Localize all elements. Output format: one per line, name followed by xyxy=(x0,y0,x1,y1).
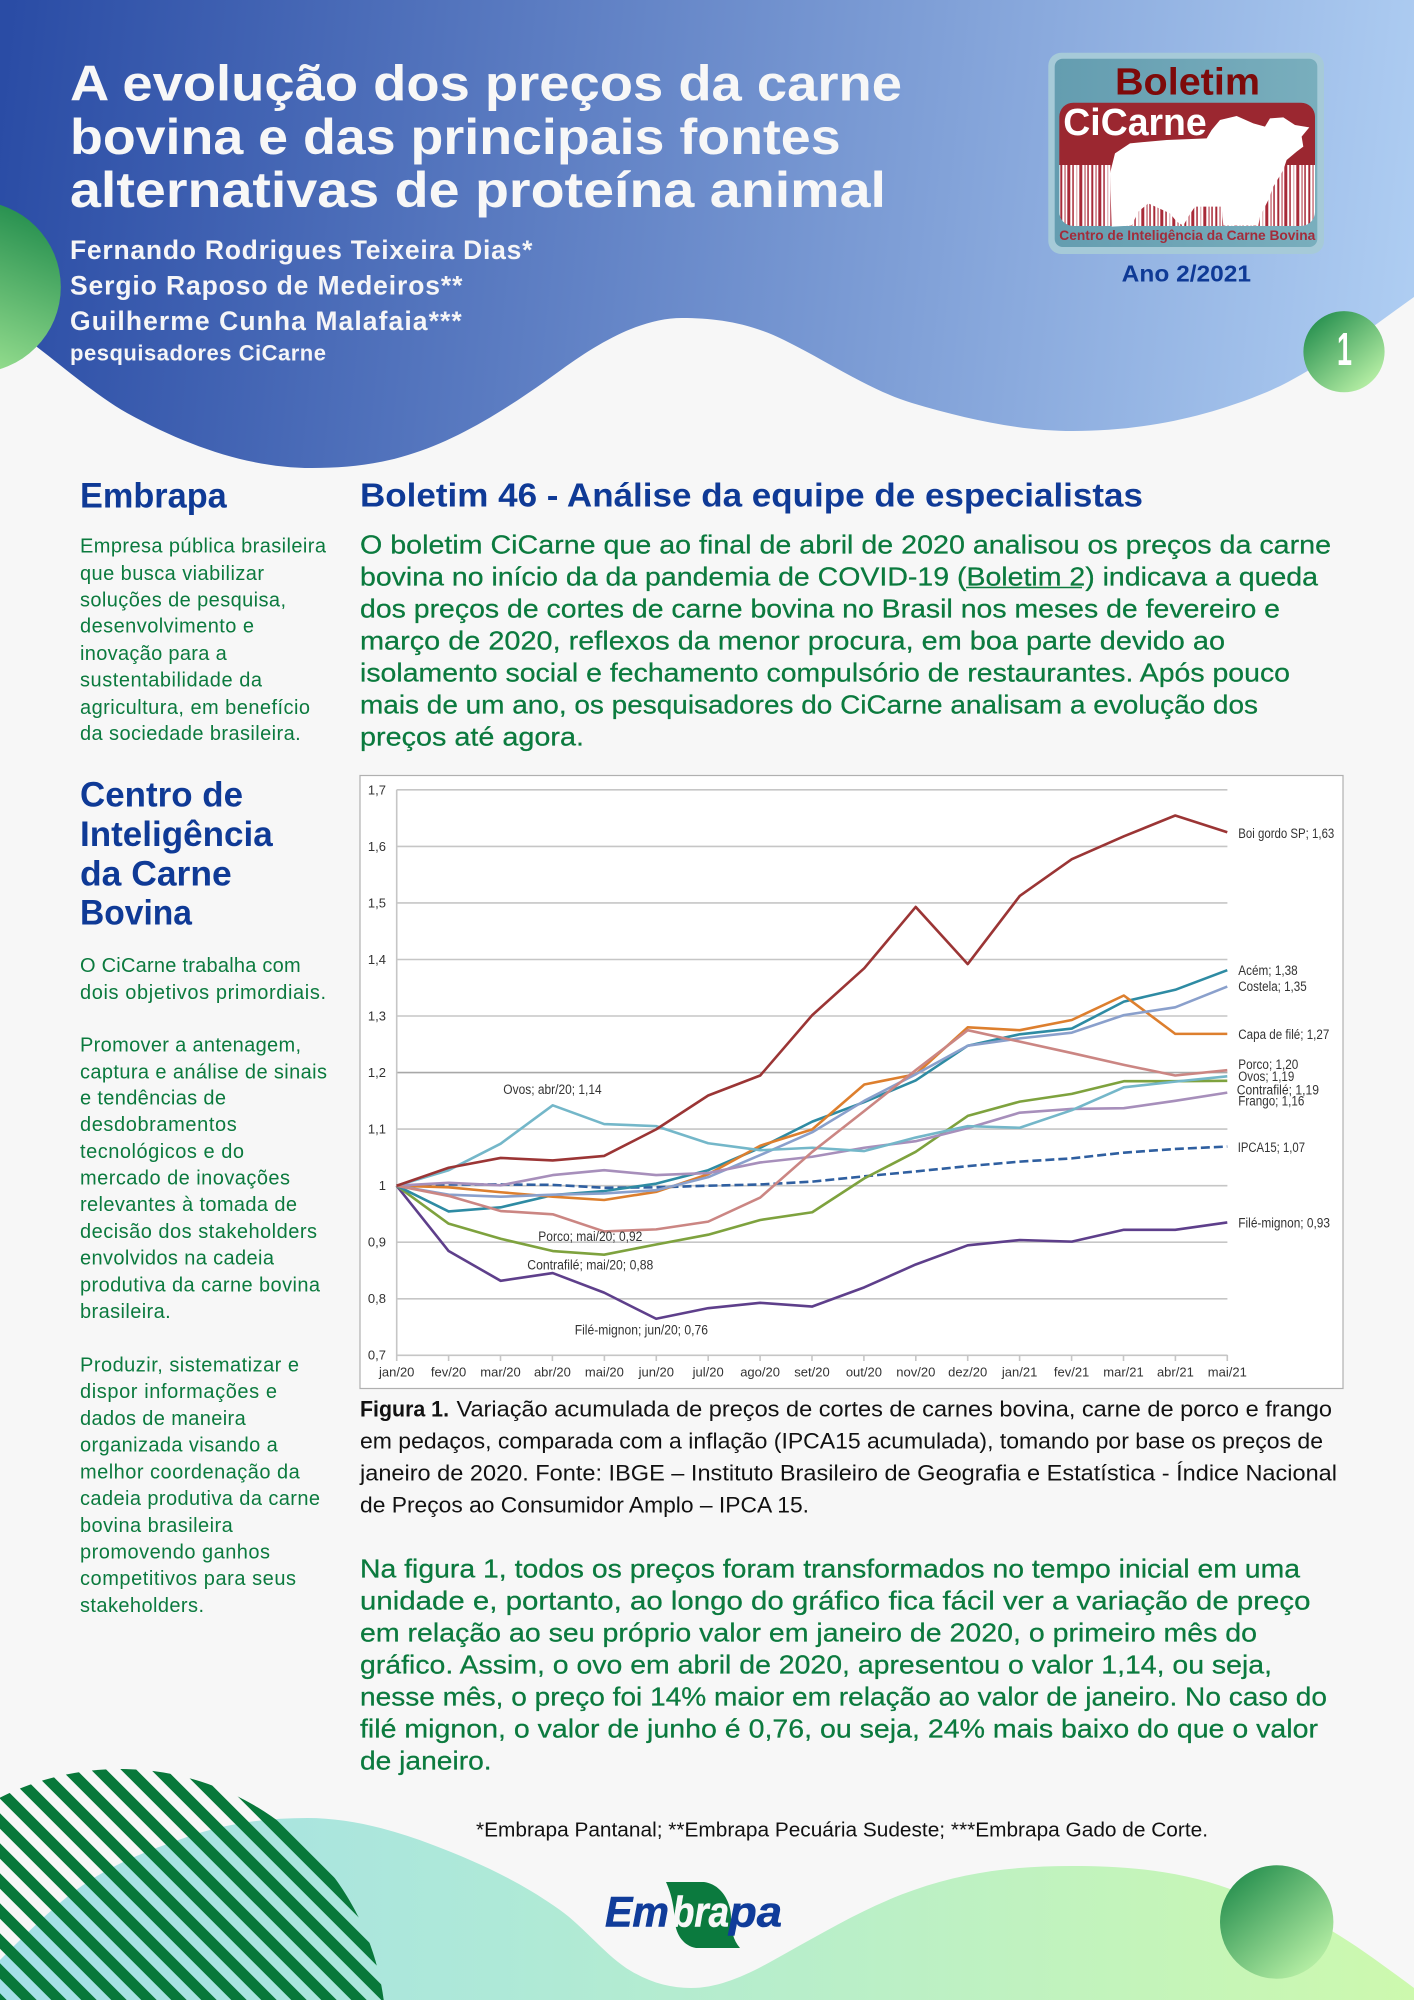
x axis labels: mai/20 xyxy=(585,1365,624,1380)
text: CiCarne objectives: Produzir, sistematizar e xyxy=(80,1355,299,1377)
text: CiCarne objectives: dados de maneira xyxy=(80,1408,247,1430)
text: explanation paragraph: em relação ao seu próprio valor em janeiro de 2020, o primeiro mês do xyxy=(360,1618,1257,1648)
chart data labels: Contrafilé; 1,19 xyxy=(1237,1082,1319,1098)
authors: Guilherme Cunha Malafaia*** xyxy=(70,306,462,336)
text: CiCarne objectives: organizada visando a xyxy=(80,1435,279,1457)
y axis labels: 1,3 xyxy=(368,1008,386,1024)
x axis labels: jun/20 xyxy=(638,1365,674,1380)
text: Embrapa description: soluções de pesquisa, xyxy=(80,590,286,612)
footer wave background xyxy=(0,1818,1414,2000)
figure caption: de Preços ao Consumidor Amplo – IPCA 15. xyxy=(360,1493,809,1518)
text: CiCarne objectives: decisão dos stakeholders xyxy=(80,1221,317,1243)
text: CiCarne objectives: Promover a antenagem, xyxy=(80,1035,301,1057)
y axis labels: 1 xyxy=(379,1178,386,1193)
y axis labels: 0,8 xyxy=(368,1291,386,1306)
text: CiCarne objectives: relevantes à tomada de xyxy=(80,1194,297,1216)
logo: Embrapa xyxy=(605,1882,782,1948)
text: introduction paragraph: março de 2020, reflexos da menor procura, em boa parte devido ao xyxy=(360,625,1225,655)
text: CiCarne objectives: captura e análise de sinais xyxy=(80,1061,327,1083)
text: CiCarne objectives: envolvidos na cadeia xyxy=(80,1248,275,1270)
heading: Boletim 46: Boletim 46 - Análise da equipe de especialistas xyxy=(360,477,1143,514)
text: explanation paragraph: de janeiro. xyxy=(360,1746,492,1776)
text: CiCarne objectives: melhor coordenação da xyxy=(80,1461,301,1483)
heading: Centro de Inteligência da Carne Bovina: Centro de xyxy=(80,776,243,815)
figure caption xyxy=(359,1397,1337,1518)
line chart: figure 1 xyxy=(360,776,1343,1388)
logo: Boletim CiCarne: Centro de Inteligência da Carne Bovina xyxy=(1059,227,1315,243)
text: introduction paragraph: mais de um ano, os pesquisadores do CiCarne analisam a evolução dos xyxy=(360,689,1258,719)
text: CiCarne objectives: dispor informações e xyxy=(80,1381,277,1403)
text: introduction paragraph: preços até agora. xyxy=(360,721,584,751)
chart data labels: Costela; 1,35 xyxy=(1238,979,1307,994)
decorative striped circle xyxy=(0,1769,384,2000)
logo: Boletim CiCarne xyxy=(1048,53,1324,254)
text: CiCarne objectives: produtiva da carne bovina xyxy=(80,1274,321,1296)
text: CiCarne objectives: promovendo ganhos xyxy=(80,1542,270,1564)
logo: Embrapa: bra xyxy=(672,1889,729,1937)
text: introduction paragraph: dos preços de cortes de carne bovina no Brasil nos meses de fevereiro e xyxy=(360,593,1280,623)
y axis labels: 1,2 xyxy=(368,1065,386,1080)
x axis labels: nov/20 xyxy=(896,1365,935,1380)
text: CiCarne objectives: bovina brasileira xyxy=(80,1515,234,1537)
chart series lines xyxy=(397,816,1227,1319)
text: CiCarne objectives: mercado de inovações xyxy=(80,1168,290,1190)
chart data labels: Ovos; abr/20; 1,14 xyxy=(503,1082,602,1097)
text: CiCarne objectives: tecnológicos e do xyxy=(80,1141,244,1163)
chart data labels: Ovos; 1,19 xyxy=(1238,1069,1294,1084)
y axis labels: 1,7 xyxy=(368,782,386,798)
x axis labels: abr/21 xyxy=(1157,1365,1194,1380)
chart data labels: Porco; mai/20; 0,92 xyxy=(538,1229,642,1244)
heading: Centro de Inteligência da Carne Bovina xyxy=(80,776,273,933)
footnote: *Embrapa Pantanal; **Embrapa Pecuária Sudeste; ***Embrapa Gado de Corte. xyxy=(476,1820,1208,1842)
chart data labels: Filé-mignon; 0,93 xyxy=(1238,1216,1330,1230)
text: explanation paragraph: Na figura 1, todos os preços foram transformados no tempo inicial em uma xyxy=(360,1554,1301,1584)
title xyxy=(70,56,902,218)
figure caption: em pedaços, comparada com a inflação (IPCA15 acumulada), tomando por base os preços de xyxy=(360,1428,1323,1453)
heading: Embrapa: Embrapa xyxy=(80,476,227,515)
authors: Sergio Raposo de Medeiros** xyxy=(70,271,463,301)
text: Embrapa description: Empresa pública brasileira xyxy=(80,536,327,558)
chart data labels: Frango; 1,16 xyxy=(1238,1094,1304,1108)
text: explanation paragraph: filé mignon, o valor de junho é 0,76, ou seja, 24% mais baixo do que o valor xyxy=(360,1714,1318,1744)
chart data labels: IPCA15; 1,07 xyxy=(1238,1140,1305,1155)
chart data labels: Capa de filé; 1,27 xyxy=(1238,1027,1329,1042)
text: CiCarne objectives: stakeholders. xyxy=(80,1595,204,1617)
text: Embrapa description: agricultura, em benefício xyxy=(80,697,310,719)
chart data labels: Contrafilé; mai/20; 0,88 xyxy=(527,1258,653,1272)
y axis labels: 0,7 xyxy=(368,1348,386,1362)
text: Embrapa description xyxy=(80,536,327,745)
authors: pesquisadores CiCarne xyxy=(70,341,326,366)
chart data labels: Boi gordo SP; 1,63 xyxy=(1238,826,1334,841)
figure caption: janeiro de 2020. Fonte: IBGE – Instituto Brasileiro de Geografia e Estatística - Índice Nacional xyxy=(359,1461,1337,1486)
x axis labels xyxy=(378,1365,1247,1380)
x axis labels: abr/20 xyxy=(534,1365,571,1380)
text: CiCarne objectives: O CiCarne trabalha com xyxy=(80,955,301,977)
header wave background xyxy=(0,0,1414,468)
text: CiCarne objectives: dois objetivos primordiais. xyxy=(80,982,326,1004)
text: introduction paragraph xyxy=(360,529,1331,751)
y axis labels xyxy=(368,782,386,1362)
text: explanation paragraph: nesse mês, o preço foi 14% maior em relação ao valor de janeiro. No caso do xyxy=(360,1682,1327,1712)
text: CiCarne objectives: desdobramentos xyxy=(80,1114,237,1136)
y axis labels: 1,1 xyxy=(368,1122,386,1136)
y axis labels: 1,5 xyxy=(368,896,386,910)
x axis labels: jan/21 xyxy=(1001,1365,1037,1380)
x axis labels: ago/20 xyxy=(740,1365,780,1380)
text: CiCarne objectives xyxy=(80,955,327,1617)
text: explanation paragraph xyxy=(360,1554,1327,1776)
y axis labels: 0,9 xyxy=(368,1234,386,1250)
figure caption: Figura 1. xyxy=(360,1397,449,1422)
title: bovina e das principais fontes xyxy=(70,109,841,165)
chart data labels: Filé-mignon; jun/20; 0,76 xyxy=(575,1322,708,1338)
title: alternativas de proteína animal xyxy=(70,162,886,218)
decorative green circle bottom right xyxy=(1220,1865,1333,1979)
panel: CiCarne sidebar xyxy=(80,776,327,1617)
logo: Boletim CiCarne: Boletim xyxy=(1115,61,1260,103)
panel: Embrapa sidebar xyxy=(80,476,327,745)
title: A evolução dos preços da carne xyxy=(70,56,902,112)
text: Embrapa description: da sociedade brasileira. xyxy=(80,723,301,745)
text: Embrapa description: sustentabilidade da xyxy=(80,670,263,692)
text: Embrapa description: desenvolvimento e xyxy=(80,616,254,638)
text: introduction paragraph: isolamento social e fechamento compulsório de restaurantes. Após pouco xyxy=(360,657,1290,687)
x axis labels: mar/21 xyxy=(1103,1365,1144,1380)
heading: Centro de Inteligência da Carne Bovina: Inteligência xyxy=(80,815,273,854)
figure caption: Variação acumulada de preços de cortes de carnes bovina, carne de porco e frango xyxy=(456,1397,1332,1422)
chart data labels: Porco; 1,20 xyxy=(1238,1057,1298,1072)
x axis labels: set/20 xyxy=(794,1365,830,1380)
text: introduction paragraph: O boletim CiCarne que ao final de abril de 2020 analisou os preços da carne xyxy=(360,529,1331,559)
chart data labels xyxy=(503,826,1334,1338)
page number badge xyxy=(1303,311,1385,392)
text: CiCarne objectives: cadeia produtiva da carne xyxy=(80,1488,320,1510)
x axis labels: jan/20 xyxy=(378,1365,414,1380)
text: Embrapa description: inovação para a xyxy=(80,643,228,665)
page number badge: 1 xyxy=(1337,323,1352,375)
x axis labels: fev/20 xyxy=(431,1365,466,1380)
y axis labels: 1,4 xyxy=(368,952,386,967)
text: explanation paragraph: gráfico. Assim, o ovo em abril de 2020, apresentou o valor 1,14, ou seja, xyxy=(360,1650,1272,1680)
text: CiCarne objectives: brasileira. xyxy=(80,1301,171,1323)
logo: Embrapa: Em xyxy=(605,1889,669,1937)
decorative green circle left xyxy=(0,201,61,373)
x axis labels: dez/20 xyxy=(948,1365,987,1380)
chart data labels: Acém; 1,38 xyxy=(1238,963,1298,978)
text: CiCarne objectives: competitivos para seus xyxy=(80,1568,296,1590)
text: introduction paragraph: bovina no início da da pandemia de COVID-19 (Boletim 2) indicava a queda xyxy=(360,561,1319,591)
text: explanation paragraph: unidade e, portanto, ao longo do gráfico fica fácil ver a variação de preço xyxy=(360,1586,1310,1616)
x axis labels: out/20 xyxy=(846,1365,882,1380)
heading: Centro de Inteligência da Carne Bovina: da Carne xyxy=(80,854,232,893)
issue year: Ano 2/2021 xyxy=(1122,261,1251,287)
logo: Boletim CiCarne: CiCarne xyxy=(1063,102,1207,144)
x axis labels: jul/20 xyxy=(692,1365,724,1380)
authors xyxy=(70,235,533,366)
text: CiCarne objectives: e tendências de xyxy=(80,1087,226,1109)
heading: Centro de Inteligência da Carne Bovina: Bovina xyxy=(80,894,192,933)
y axis labels: 1,6 xyxy=(368,839,386,854)
x axis labels: mar/20 xyxy=(480,1365,521,1380)
authors: Fernando Rodrigues Teixeira Dias* xyxy=(70,235,533,265)
text: Embrapa description: que busca viabilizar xyxy=(80,563,264,585)
x axis labels: mai/21 xyxy=(1208,1365,1247,1380)
x axis labels: fev/21 xyxy=(1054,1365,1089,1380)
logo: Embrapa: pa xyxy=(728,1889,782,1937)
